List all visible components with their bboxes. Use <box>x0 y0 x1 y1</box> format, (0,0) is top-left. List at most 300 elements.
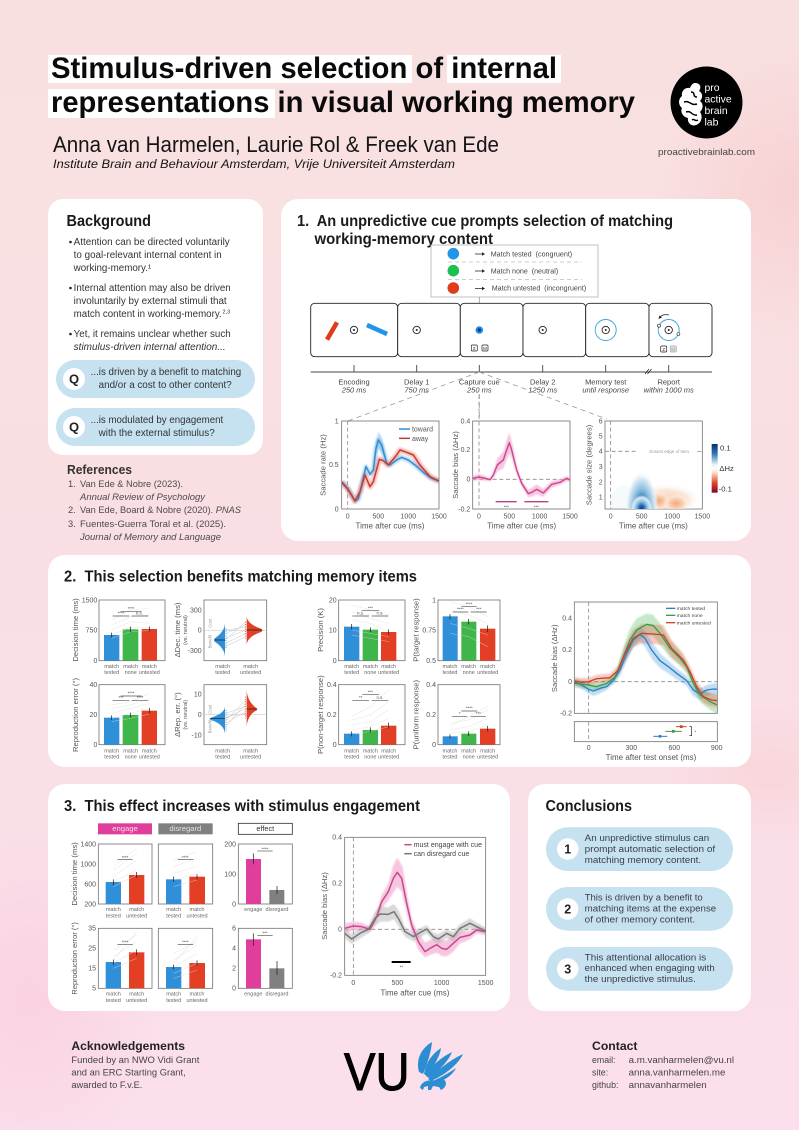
chart: decision time bars: n.s. <box>136 611 143 616</box>
references <box>67 462 242 542</box>
chart: precision bars: 20 <box>329 597 337 604</box>
heading: background: Background <box>66 213 151 230</box>
chart: reproduction error disregard: tested <box>166 998 181 1004</box>
chart: reproduction error bars: **** <box>137 695 144 700</box>
acknowledgements <box>71 1041 200 1090</box>
conclusion 2: 2 <box>564 902 571 916</box>
chart: saccade bias by condition <box>550 602 717 718</box>
chart: decision time effect: 0 <box>232 901 236 908</box>
chart: delta reproduction error violins: 0 <box>198 712 202 719</box>
label: disregard: disregard <box>169 824 201 833</box>
chart: reproduction error engage <box>70 922 152 1004</box>
chart: saccade bias engage vs disregard <box>320 835 494 997</box>
chart: delta decision time violins: 0 <box>198 628 202 635</box>
question 2: Q <box>69 420 79 434</box>
chart: saccade bias engage vs disregard: 0.4 <box>332 835 342 842</box>
chart: delta decision time violins: untested <box>240 670 261 676</box>
label: effect: effect <box>256 824 274 833</box>
chart: delta decision time violins: ΔDec. time (ms) <box>173 602 182 657</box>
chart: decision time onset marks: 0 <box>587 745 591 752</box>
chart: non-target response bars: none <box>364 754 376 760</box>
conclusion 3: This attentional allocation is <box>585 952 706 963</box>
acknowledgements: and an ERC Starting Grant, <box>71 1068 186 1078</box>
bullet list: match content in working-memory. <box>74 309 222 320</box>
chart: reproduction error engage: 25 <box>88 946 96 953</box>
chart: delta decision time violins: Benefit <box>207 634 212 648</box>
chart: saccade bias engage vs disregard: 0 <box>338 927 342 934</box>
label: engage: engage <box>112 824 138 833</box>
contact: a.m.vanharmelen@vu.nl <box>629 1055 734 1065</box>
chart: reproduction error effect: disregard <box>266 991 288 997</box>
legend: cue conditions: Match tested (congruent) <box>491 250 573 258</box>
chart: saccade rate: 1 <box>335 418 339 425</box>
chart: decision time engage: match <box>106 907 121 913</box>
label: effect <box>238 823 292 834</box>
contact <box>592 1041 734 1090</box>
chart: saccade size heatmap <box>586 418 710 530</box>
bullet list: involuntarily by external stimuli that <box>74 296 227 307</box>
chart: decision time disregard: untested <box>186 914 208 920</box>
contact: anna.vanharmelen.me <box>629 1068 726 1078</box>
chart: decision time effect <box>224 841 292 913</box>
chart: target response bars: match <box>461 664 476 670</box>
chart: decision time bars: 0 <box>93 658 97 665</box>
chart: non-target response bars: match <box>381 748 396 754</box>
chart: reproduction error effect: 2 <box>232 966 236 973</box>
chart: target response bars: 0.5 <box>426 658 436 665</box>
question 1: Q <box>69 372 79 386</box>
trial sequence: M <box>483 346 487 351</box>
chart: reproduction error bars: Reproduction error (°) <box>71 677 80 752</box>
chart: reproduction error disregard: match <box>190 991 204 997</box>
chart: reproduction error bars: 0 <box>93 742 97 749</box>
chart: reproduction error engage: Reproduction error (°) <box>70 922 79 995</box>
contact: Contact <box>592 1041 638 1053</box>
chart: decision time bars: Decision time (ms) <box>71 598 80 662</box>
chart: target response bars: **** <box>466 601 473 606</box>
chart: delta reproduction error violins: Benefit <box>207 719 212 733</box>
question 2: with the external stimulus? <box>98 428 215 439</box>
chart: non-target response bars: match <box>344 748 359 754</box>
chart: reproduction error disregard: match <box>166 991 181 997</box>
chart: saccade bias engage vs disregard: 500 <box>392 980 403 987</box>
chart: reproduction error engage: 35 <box>88 926 96 933</box>
question 2: ...is modulated by engagement <box>91 415 224 426</box>
chart: decision time engage: 200 <box>84 901 96 908</box>
panel: section 1 <box>281 199 751 546</box>
chart: saccade rate: 500 <box>373 513 384 520</box>
conclusion 2: of other memory content. <box>585 914 695 925</box>
chart: decision time engage: **** <box>122 855 129 860</box>
chart: precision bars: 0 <box>333 658 337 665</box>
chart: saccade rate: Saccade rate (Hz) <box>318 434 327 496</box>
chart: precision bars: 10 <box>329 628 337 635</box>
heading: conclusions: Conclusions <box>546 798 632 815</box>
chart: reproduction error bars: untested <box>139 754 160 760</box>
chart: delta reproduction error violins: match <box>215 748 230 754</box>
heading: section 3: 3. This effect increases with stimulus engagement <box>64 798 420 815</box>
title <box>48 52 635 119</box>
chart: precision bars <box>316 597 405 676</box>
chart: reproduction error bars: 20 <box>90 712 97 719</box>
chart: saccade bias engage vs disregard: ** <box>400 965 403 970</box>
chart: non-target response bars: 0.4 <box>327 682 337 689</box>
chart: delta reproduction error violins: (vs. neutral) <box>183 700 189 730</box>
timeline: Memory test <box>585 378 627 386</box>
chart: saccade size heatmap: 5 <box>599 433 603 440</box>
chart: saccade rate: 0 <box>346 513 350 520</box>
bullet list: to goal-relevant internal content in <box>74 250 222 261</box>
chart: decision time onset marks: * <box>694 729 696 734</box>
chart: precision bars: match <box>363 664 378 670</box>
chart: delta reproduction error violins <box>173 685 267 760</box>
panel: background <box>48 199 263 455</box>
question 1: and/or a cost to other content? <box>99 380 232 391</box>
contact: email: <box>592 1055 615 1065</box>
timeline: within 1000 ms <box>644 386 694 394</box>
chart: reproduction error disregard: **** <box>182 940 189 945</box>
chart: saccade bias engage vs disregard: Time after cue (ms) <box>381 988 450 997</box>
chart: decision time bars: 750 <box>86 628 97 635</box>
chart: decision time engage <box>70 841 152 920</box>
chart: decision time bars: **** <box>128 606 135 611</box>
chart: saccade bias: -0.2 <box>458 506 470 513</box>
chart: decision time bars: match <box>104 664 119 670</box>
bullet list: Attention can be directed voluntarily <box>74 237 230 248</box>
chart: delta reproduction error violins: tested <box>215 754 230 760</box>
chart: reproduction error engage: **** <box>122 940 129 945</box>
question 2 <box>56 408 255 446</box>
chart: uniform response bars: untested <box>477 754 498 760</box>
chart: decision time engage: match <box>129 907 144 913</box>
color bar <box>712 443 734 493</box>
chart: decision time effect: disregard <box>266 907 288 913</box>
chart: delta decision time violins: (vs. neutral) <box>183 615 189 645</box>
timeline: until response <box>582 386 629 394</box>
bullet list <box>69 237 231 353</box>
chart: saccade size heatmap: 500 <box>636 513 648 520</box>
chart: saccade bias: 500 <box>504 513 515 520</box>
chart: saccade size heatmap: 1 <box>599 495 603 502</box>
chart: reproduction error bars <box>71 677 165 760</box>
chart: reproduction error bars: match <box>142 748 157 754</box>
chart: reproduction error bars: none <box>125 754 137 760</box>
references: 3. <box>68 519 76 529</box>
chart: uniform response bars: none <box>463 754 475 760</box>
chart: non-target response bars <box>316 675 405 760</box>
bullet list: 2,3 <box>222 310 230 316</box>
dashed zoom lines <box>348 372 607 421</box>
chart: uniform response bars: tested <box>443 754 457 760</box>
chart: decision time onset marks: 900 <box>711 745 723 752</box>
chart: non-target response bars: ** <box>359 695 363 700</box>
timeline: Capture cue <box>459 378 500 386</box>
conclusion 1: 1 <box>564 842 571 856</box>
chart: precision bars: untested <box>378 670 399 676</box>
chart: uniform response bars <box>412 680 500 760</box>
chart: decision time onset marks: 600 <box>669 745 680 752</box>
logo: proactive brain lab: active <box>704 94 732 106</box>
conclusion 3: enhanced when engaging with <box>585 963 715 974</box>
chart: decision time effect: 200 <box>224 841 236 848</box>
chart: precision bars: Precision (K) <box>316 608 325 652</box>
chart: target response bars: untested <box>477 670 498 676</box>
heading: section 2: 2. This selection benefits matching memory items <box>64 568 417 586</box>
chart: reproduction error effect: engage <box>244 991 262 997</box>
chart: delta reproduction error violins: Cost <box>207 704 212 714</box>
conclusion 3: 3 <box>564 962 571 976</box>
chart: uniform response bars: 0.2 <box>426 712 436 719</box>
chart: saccade bias by condition: 0 <box>568 679 572 686</box>
chart: precision bars: none <box>364 670 376 676</box>
chart: saccade bias: Time after cue (ms) <box>487 521 556 530</box>
chart: target response bars: 1 <box>432 597 436 604</box>
chart: delta decision time violins: tested <box>215 670 230 676</box>
legend: cue conditions <box>431 245 598 297</box>
chart: reproduction error effect: 6 <box>232 926 236 933</box>
chart: saccade rate: Time after cue (ms) <box>356 521 425 530</box>
references: Fuentes-Guerra Toral et al. (2025). <box>80 519 226 529</box>
chart: saccade size heatmap: 6 <box>599 418 603 425</box>
contact: annavanharmelen <box>629 1080 707 1090</box>
chart: saccade bias: 0 <box>477 513 481 520</box>
chart: uniform response bars: * <box>459 711 461 716</box>
chart: saccade bias by condition: 0.2 <box>562 647 572 654</box>
chart: decision time disregard: match <box>166 907 181 913</box>
references: Annual Review of Psychology <box>79 492 206 502</box>
chart: decision time engage: 1000 <box>80 862 96 869</box>
question 1: ...is driven by a benefit to matching <box>91 367 241 378</box>
timeline: 1250 ms <box>528 386 557 394</box>
bullet list: Internal attention may also be driven <box>74 283 231 294</box>
legend: cue conditions: Match untested (incongruent) <box>492 284 587 292</box>
chart: saccade bias by condition: match untested <box>677 620 711 626</box>
chart: saccade size heatmap: Saccade size (degrees) <box>585 424 594 505</box>
chart: non-target response bars: untested <box>378 754 399 760</box>
conclusion 3: the unpredictive stimulus. <box>585 974 696 985</box>
chart: non-target response bars: n.s. <box>377 695 383 700</box>
website: proactivebrainlab.com <box>658 147 755 158</box>
logo: proactive brain lab: brain <box>704 106 728 117</box>
chart: decision time onset marks: Time after test onset (ms) <box>606 753 697 762</box>
chart: decision time effect: engage <box>244 907 262 913</box>
chart: reproduction error bars: *** <box>118 695 124 700</box>
chart: decision time onset marks: 300 <box>626 745 637 752</box>
chart: saccade bias engage vs disregard: -0.2 <box>330 973 342 980</box>
legend: cue conditions: Match none (neutral) <box>491 266 559 276</box>
references: Van Ede & Nobre (2023). <box>80 479 183 489</box>
title: Stimulus-driven selection of internal <box>51 52 557 85</box>
heading: section 1: 1. An unpredictive cue prompts selection of matching <box>297 213 673 230</box>
chart: delta decision time violins: match <box>243 664 258 670</box>
chart: reproduction error disregard <box>158 928 213 1004</box>
chart: reproduction error engage: tested <box>106 998 121 1004</box>
chart: delta reproduction error violins: match <box>243 748 258 754</box>
bullet list: Yet, it remains unclear whether such <box>74 329 231 340</box>
chart: target response bars: match <box>480 664 495 670</box>
chart: uniform response bars: *** <box>476 711 481 716</box>
title: representations in visual working memory <box>51 86 635 119</box>
chart: delta decision time violins: 300 <box>190 608 202 615</box>
conclusion 2 <box>546 887 733 931</box>
chart: saccade bias: 0.2 <box>461 447 470 454</box>
heading: section 1 <box>297 213 673 248</box>
chart: decision time bars: none <box>125 670 137 676</box>
label: engage <box>98 823 152 834</box>
chart: decision time bars: tested <box>104 670 119 676</box>
chart: target response bars: tested <box>443 670 457 676</box>
chart: saccade rate: 0 <box>335 506 339 513</box>
chart: saccade size heatmap: 4 <box>599 449 603 456</box>
chart: decision time effect: 100 <box>224 871 236 878</box>
chart: target response bars <box>412 597 500 676</box>
chart: reproduction error bars: tested <box>104 754 119 760</box>
icon: griffin <box>418 1042 463 1090</box>
chart: reproduction error effect: 0 <box>232 986 236 993</box>
conclusion 1: An unpredictive stimulus can <box>585 833 709 844</box>
chart: saccade bias by condition: 0.4 <box>562 615 572 622</box>
timeline <box>311 365 712 394</box>
chart: reproduction error bars: match <box>123 748 138 754</box>
chart: saccade size heatmap: 0 <box>609 513 613 520</box>
references: Van Ede, Board & Nobre (2020). PNAS <box>80 505 242 515</box>
chart: delta decision time violins: match <box>215 664 230 670</box>
chart: decision time engage: Decision time (ms) <box>70 842 79 906</box>
timeline: 750 ms <box>404 386 429 394</box>
chart: decision time bars <box>71 597 165 676</box>
chart: saccade bias engage vs disregard: 1500 <box>478 980 494 987</box>
chart: precision bars: match <box>344 664 359 670</box>
chart: target response bars: **** <box>457 607 464 612</box>
chart: decision time effect: **** <box>262 846 269 851</box>
timeline: 250 ms <box>466 386 492 394</box>
chart: precision bars: tested <box>344 670 359 676</box>
chart: saccade bias by condition: match tested <box>677 606 705 612</box>
chart: target response bars: 0.75 <box>422 628 436 635</box>
chart: non-target response bars: 0 <box>333 742 337 749</box>
conclusion 1 <box>546 827 733 871</box>
chart: precision bars: *** <box>368 605 373 610</box>
panel: section 3 <box>48 784 510 1011</box>
chart: precision bars: n.s. <box>377 611 383 616</box>
chart: saccade rate: 1000 <box>401 513 416 520</box>
chart: target response bars: *** <box>476 607 482 612</box>
chart: saccade bias: 0.4 <box>461 418 470 425</box>
chart: reproduction error effect <box>232 926 292 997</box>
chart: saccade rate: 1500 <box>431 513 447 520</box>
conclusion 3 <box>546 947 733 991</box>
timeline: Encoding <box>338 378 370 386</box>
chart: decision time engage: tested <box>106 914 121 920</box>
chart: saccade size heatmap: Time after cue (ms) <box>619 521 688 530</box>
chart: reproduction error engage: match <box>106 991 121 997</box>
authors: Anna van Harmelen, Laurie Rol & Freek van Ede <box>53 132 499 157</box>
chart: non-target response bars: P(non-target response) <box>316 675 325 754</box>
references: 1. <box>68 479 76 489</box>
chart: saccade bias engage vs disregard: must engage with cue <box>414 842 482 849</box>
logo: VU: VU <box>344 1043 410 1102</box>
chart: uniform response bars: 0 <box>432 742 436 749</box>
trial sequence: M <box>671 347 675 352</box>
chart: decision time engage: untested <box>126 914 147 920</box>
chart: reproduction error effect: *** <box>262 931 268 936</box>
chart: precision bars: n.s. <box>357 611 364 616</box>
color bar: -0.1 <box>719 484 732 493</box>
chart: delta decision time violins: -300 <box>188 648 202 655</box>
question 1 <box>56 360 255 398</box>
timeline: Delay 1 <box>404 378 429 386</box>
references: References <box>67 462 132 477</box>
chart: saccade rate <box>318 418 447 530</box>
chart: delta reproduction error violins: ΔRep. err. (°) <box>173 692 182 737</box>
color bar: 0.1 <box>720 443 731 452</box>
chart: saccade size heatmap: closest edge of item <box>649 449 689 454</box>
logo: proactive brain lab: pro <box>704 83 720 94</box>
chart: delta decision time violins: Cost <box>207 618 212 628</box>
chart: saccade bias by condition: Saccade bias (ΔHz) <box>550 624 559 692</box>
chart: saccade bias <box>451 395 578 530</box>
chart: non-target response bars: *** <box>368 689 373 694</box>
chart: saccade bias engage vs disregard: Saccade bias (ΔHz) <box>320 872 329 940</box>
panel: conclusions <box>528 784 751 1011</box>
chart: saccade bias by condition: -0.2 <box>560 711 572 718</box>
chart: saccade bias engage vs disregard: 1000 <box>434 980 450 987</box>
chart: saccade rate: away <box>412 436 429 443</box>
conclusion 2: matching items at the expense <box>585 904 716 914</box>
chart: uniform response bars: 0.4 <box>426 682 436 689</box>
timeline: Report <box>657 378 681 386</box>
logo: proactive brain lab <box>670 66 742 138</box>
chart: saccade bias: 1500 <box>562 513 578 520</box>
affiliation: Institute Brain and Behaviour Amsterdam, Vrije Universiteit Amsterdam <box>53 157 455 171</box>
chart: decision time onset marks <box>574 722 723 762</box>
chart: uniform response bars: **** <box>466 706 473 711</box>
chart: decision time disregard: tested <box>166 914 181 920</box>
chart: saccade bias: Saccade bias (ΔHz) <box>451 431 460 499</box>
chart: reproduction error bars: match <box>104 748 119 754</box>
arrow: legend to capture cue <box>478 297 480 310</box>
chart: reproduction error effect: 4 <box>232 946 236 953</box>
chart: target response bars: P(target response) <box>412 598 421 662</box>
heading: section 1: working-memory content <box>314 231 493 248</box>
chart: saccade bias engage vs disregard: can disregard cue <box>414 851 469 858</box>
chart: target response bars: match <box>443 664 457 670</box>
references: 2. <box>68 505 76 515</box>
trial sequence: Z <box>662 347 665 352</box>
chart: delta reproduction error violins: 10 <box>194 692 202 699</box>
chart: uniform response bars: P(uniform response) <box>412 680 421 749</box>
chart: saccade size heatmap: 2 <box>599 479 603 486</box>
conclusion 1: matching memory content. <box>585 855 701 866</box>
chart: uniform response bars: match <box>461 748 476 754</box>
chart: saccade bias: *** <box>534 504 539 509</box>
chart: saccade bias: 0 <box>466 477 470 484</box>
chart: non-target response bars: 0.2 <box>327 712 337 719</box>
chart: reproduction error disregard: untested <box>186 998 208 1004</box>
chart: non-target response bars: tested <box>344 754 359 760</box>
bullet list: stimulus-driven internal attention... <box>74 342 226 353</box>
conclusion 2: This is driven by a benefit to <box>585 893 703 904</box>
chart: decision time bars: 1500 <box>82 597 97 604</box>
chart: saccade rate: 0.5 <box>329 462 339 469</box>
chart: saccade rate: toward <box>412 427 433 434</box>
timeline: Delay 2 <box>530 378 555 386</box>
chart: decision time bars: match <box>142 664 157 670</box>
chart: reproduction error engage: untested <box>126 998 147 1004</box>
logo: proactive brain lab: lab <box>704 118 719 128</box>
contact: github: <box>592 1080 618 1090</box>
chart: reproduction error bars: 40 <box>90 682 97 689</box>
